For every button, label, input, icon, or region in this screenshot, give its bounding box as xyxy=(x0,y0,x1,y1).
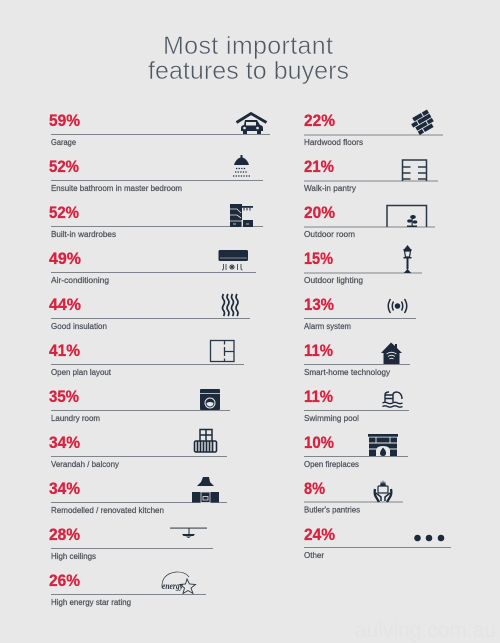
icon: street lamp xyxy=(404,245,412,273)
row: ensuite xyxy=(49,155,263,193)
row: ensuite: Ensuite bathroom in master bedroom xyxy=(51,183,182,193)
row: alarm xyxy=(304,295,416,331)
row: air conditioning: Air-conditioning xyxy=(51,275,109,285)
row: kitchen xyxy=(49,477,227,515)
row: wardrobes: Built-in wardrobes xyxy=(51,229,116,239)
row: laundry: 35% xyxy=(49,387,79,406)
title: features to buyers xyxy=(148,57,349,85)
row: hardwood xyxy=(304,110,443,147)
row: smart home: 11% xyxy=(304,341,333,360)
row: kitchen: Remodelled / renovated kitchen xyxy=(51,505,164,515)
row: smart home xyxy=(304,341,410,377)
row: laundry xyxy=(49,387,230,423)
icon: ceiling fan xyxy=(170,528,207,538)
row: garage xyxy=(49,111,270,147)
icon: floor plan xyxy=(210,340,234,362)
row: energy star: 26% xyxy=(49,571,80,590)
row: butler's pantries xyxy=(304,479,403,514)
row: verandah: 34% xyxy=(49,433,80,452)
row: pantry: 21% xyxy=(304,157,334,176)
row: outdoor room: 20% xyxy=(304,203,335,222)
row: swimming pool xyxy=(304,387,409,423)
row: swimming pool: Swimming pool xyxy=(304,413,359,423)
icon: shower xyxy=(233,155,250,176)
icon: fireplace xyxy=(368,434,398,456)
row: air conditioning xyxy=(49,249,256,285)
row: open plan xyxy=(49,340,244,377)
icon: hardwood planks xyxy=(409,110,436,136)
icon: swimming pool xyxy=(382,392,402,407)
row: open plan: 41% xyxy=(49,341,80,360)
icon: wardrobe xyxy=(230,204,253,227)
row: other xyxy=(304,525,451,560)
row: other: 24% xyxy=(304,525,335,544)
row: kitchen: 34% xyxy=(49,479,80,498)
row: alarm: 13% xyxy=(304,295,334,314)
icon: hands holding tray xyxy=(375,480,391,502)
row: garage: Garage xyxy=(51,137,76,147)
icon: alarm signal xyxy=(388,299,407,313)
row: ceilings: 28% xyxy=(49,525,80,544)
row: open plan: Open plan layout xyxy=(51,367,112,377)
icon: energy star logo: energy xyxy=(162,582,184,592)
row: ceilings xyxy=(49,525,213,561)
row: verandah xyxy=(49,430,227,469)
row: ceilings: High ceilings xyxy=(51,551,96,561)
row: hardwood: 22% xyxy=(304,111,335,130)
row: wardrobes xyxy=(49,203,263,239)
row: energy star: High energy star rating xyxy=(51,597,131,607)
icon: air conditioner xyxy=(218,250,248,270)
row: outdoor room xyxy=(304,203,435,239)
row: smart home: Smart-home technology xyxy=(304,367,391,377)
row: outdoor lighting: 15% xyxy=(304,249,333,268)
icon: three dots xyxy=(414,535,444,541)
row: outdoor lighting: Outdoor lighting xyxy=(304,275,363,285)
row: outdoor lighting xyxy=(304,245,422,285)
row: hardwood: Hardwood floors xyxy=(304,137,363,147)
row: laundry: Laundry room xyxy=(51,413,100,423)
row: outdoor room: Outdoor room xyxy=(304,229,355,239)
icon: walk-in pantry xyxy=(402,160,426,181)
row: insulation xyxy=(49,294,250,331)
title xyxy=(148,32,349,85)
icon: balcony xyxy=(194,430,216,452)
icon: kitchen hood and cabinets xyxy=(192,477,219,502)
icon: outdoor room with plant xyxy=(387,206,426,227)
row: pantry xyxy=(304,157,438,193)
row: butler's pantries: 8% xyxy=(304,479,325,498)
row: ensuite: 52% xyxy=(49,157,79,176)
row: fireplace: Open fireplaces xyxy=(304,459,359,469)
icon: washing machine xyxy=(200,389,220,410)
row: butler's pantries: Butler's pantries xyxy=(304,504,360,514)
row: insulation: Good insulation xyxy=(51,321,107,331)
row: air conditioning: 49% xyxy=(49,249,81,268)
icon: smart home xyxy=(381,342,402,364)
row: garage: 59% xyxy=(49,111,80,130)
row: fireplace xyxy=(304,433,408,469)
row: verandah: Verandah / balcony xyxy=(51,459,120,469)
icon: heat waves xyxy=(222,294,238,316)
title: Most important xyxy=(163,32,333,60)
row: pantry: Walk-in pantry xyxy=(304,183,357,193)
row: other: Other xyxy=(304,550,324,560)
row: energy star xyxy=(49,571,206,607)
row: alarm: Alarm system xyxy=(304,321,351,331)
icon: car in garage xyxy=(236,114,266,134)
row: wardrobes: 52% xyxy=(49,203,79,222)
row: fireplace: 10% xyxy=(304,433,334,452)
watermark: aulving.com.au xyxy=(355,619,496,642)
row: insulation: 44% xyxy=(49,295,81,314)
row: swimming pool: 11% xyxy=(304,387,333,406)
icon: energy star logo xyxy=(162,572,196,594)
